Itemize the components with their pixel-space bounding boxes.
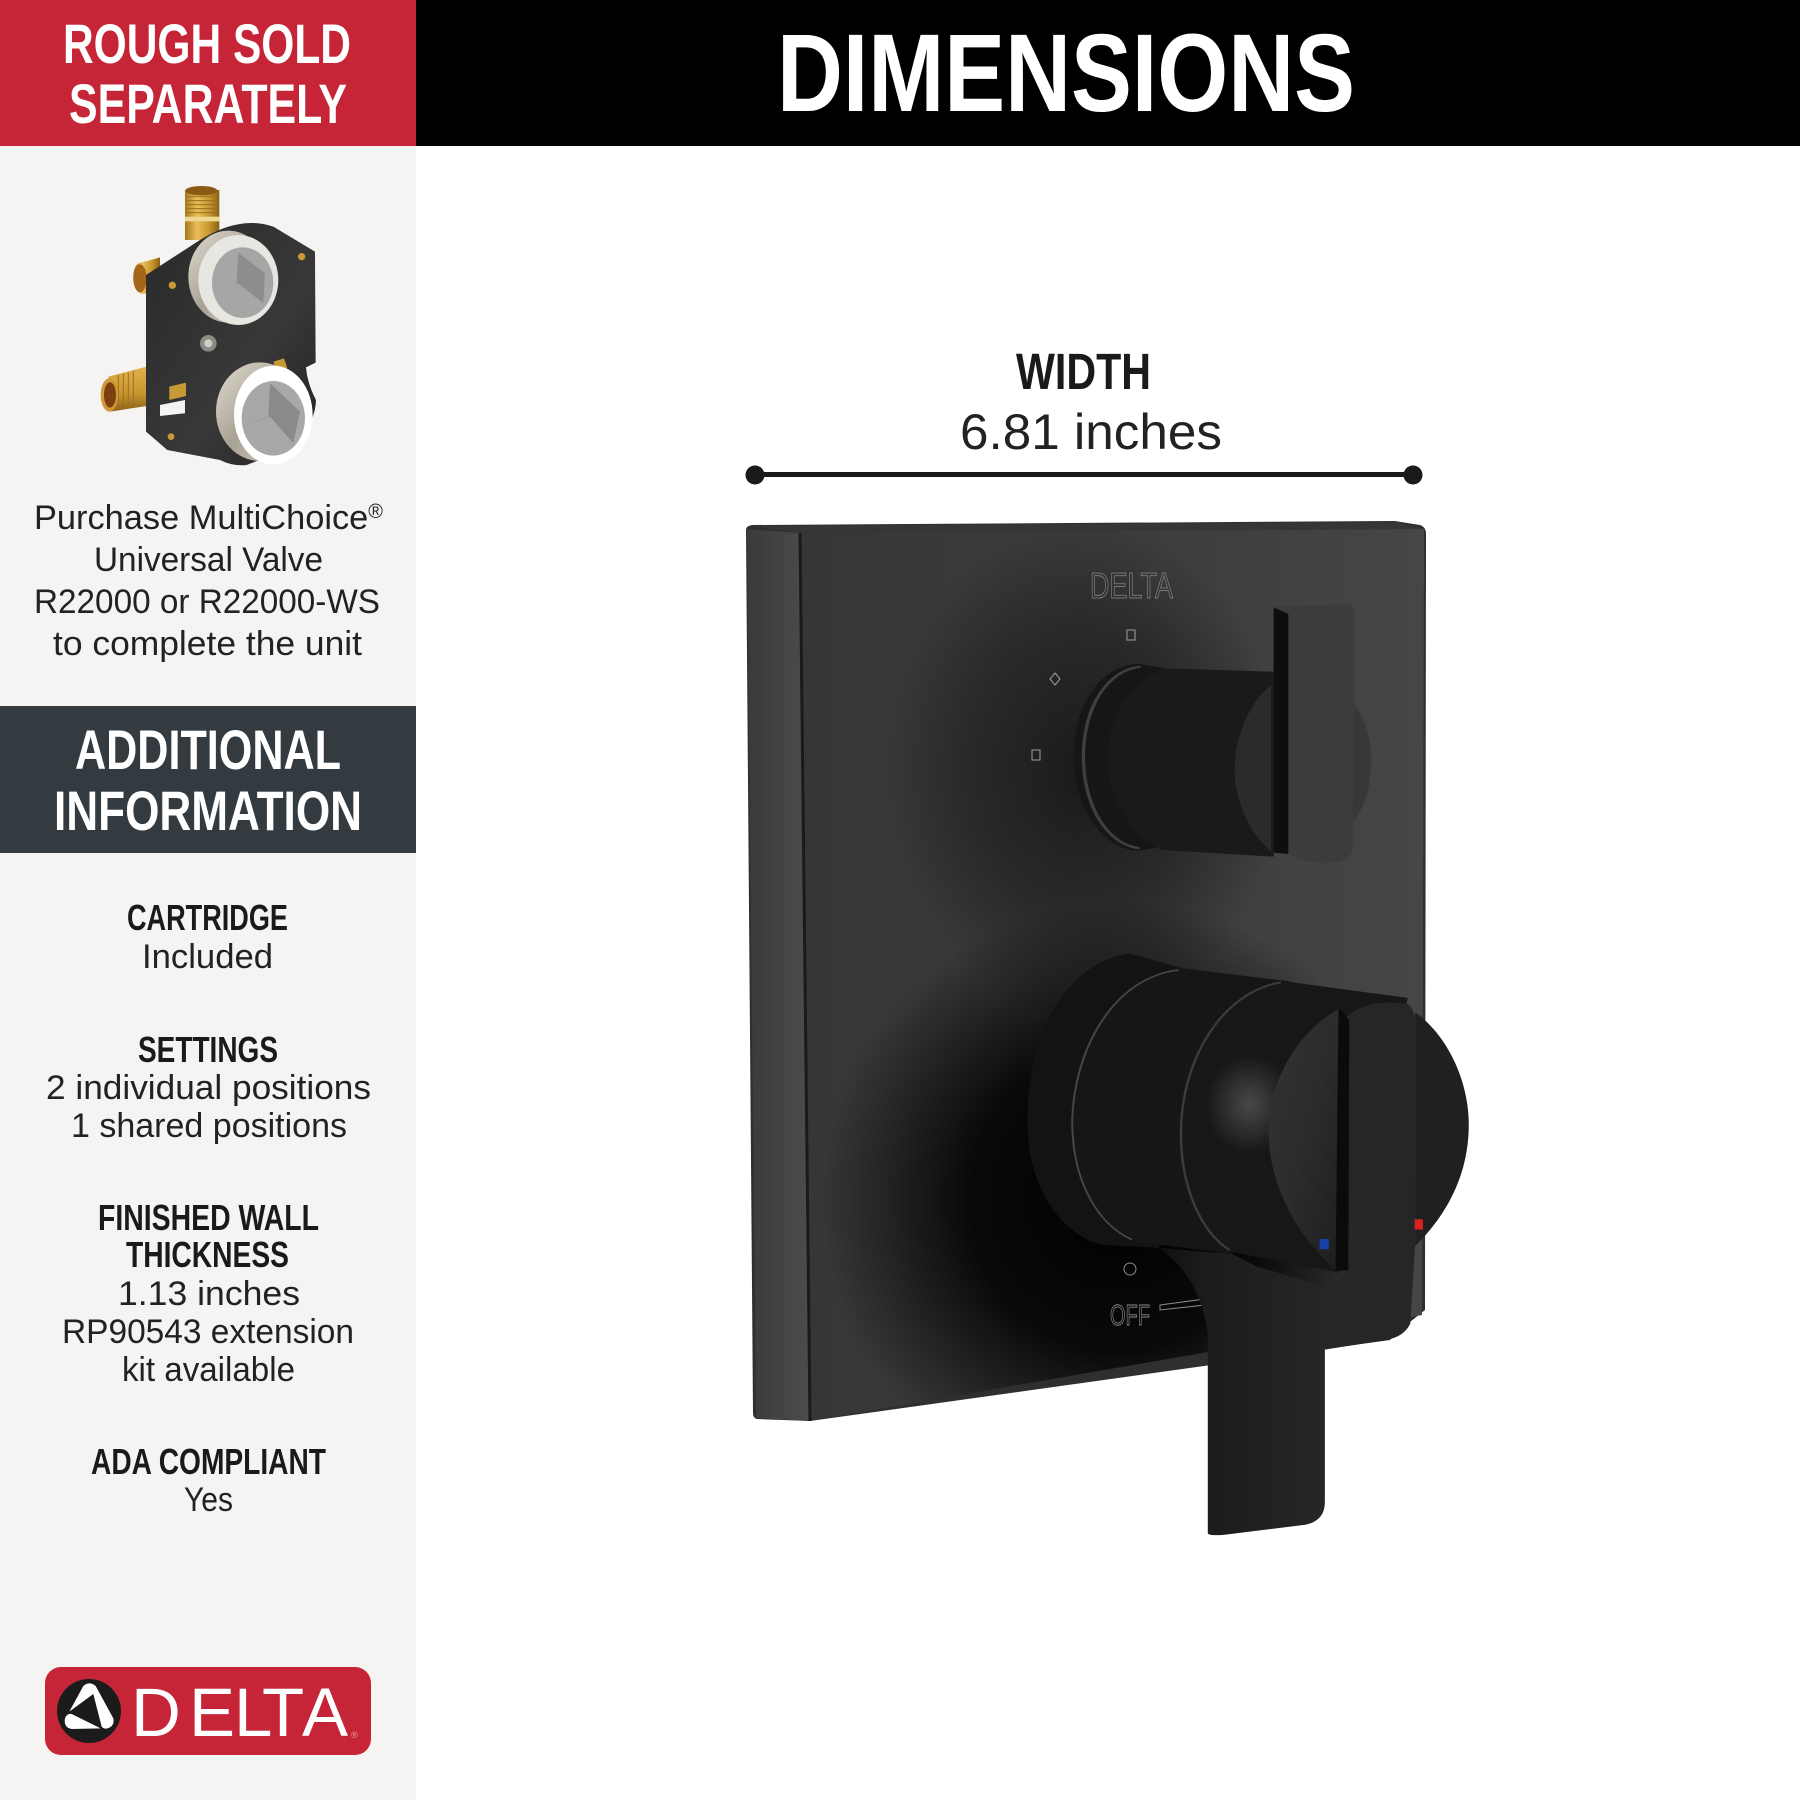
lever handle	[1159, 1248, 1325, 1535]
title banner: dimensions: DIMENSIONS	[777, 12, 1355, 135]
spec: settings	[46, 1029, 371, 1145]
wall plate	[746, 520, 1426, 1500]
plate markings	[1032, 565, 1173, 760]
sidebar background	[0, 146, 416, 1800]
red banner: rough sold separately	[0, 0, 416, 146]
text block: purchase note: to complete the unit	[53, 625, 362, 663]
text block: purchase note: Purchase MultiChoice	[34, 499, 370, 537]
product image: shower trim	[746, 520, 1469, 1535]
heading: width dimension: 6.81 inches	[960, 404, 1222, 460]
spec: settings: SETTINGS	[138, 1029, 278, 1070]
product image: rough valve	[101, 186, 316, 465]
spec: finished wall thickness: RP90543 extension	[62, 1313, 354, 1351]
spec: finished wall thickness	[62, 1197, 354, 1389]
spec: cartridge	[127, 897, 288, 976]
spec: finished wall thickness: FINISHED WALL	[98, 1197, 319, 1238]
spec: settings: 2 individual positions	[46, 1069, 371, 1107]
text block: purchase note: ®	[368, 501, 383, 523]
logo: delta	[45, 1667, 371, 1755]
spec: cartridge: CARTRIDGE	[127, 897, 288, 938]
upper diverter knob	[1074, 604, 1371, 863]
spec: settings: 1 shared positions	[71, 1107, 347, 1145]
title banner: dimensions	[416, 0, 1800, 146]
lower handle assembly	[1027, 954, 1469, 1350]
logo: delta: ®	[351, 1730, 358, 1740]
off marking	[1110, 1263, 1205, 1332]
spec: ada compliant	[91, 1441, 326, 1519]
spec: ada compliant: ADA COMPLIANT	[91, 1441, 326, 1482]
text block: purchase note: Universal Valve	[94, 541, 323, 579]
heading: additional information: ADDITIONAL	[75, 718, 341, 781]
heading: width dimension: WIDTH	[1016, 343, 1151, 400]
heading: additional information	[0, 706, 416, 853]
red banner: rough sold separately: SEPARATELY	[69, 72, 347, 135]
plate markings: DELTA	[1090, 565, 1173, 606]
red banner: rough sold separately: ROUGH SOLD	[63, 12, 351, 75]
text block: purchase note	[34, 499, 383, 663]
heading: additional information: INFORMATION	[54, 779, 362, 842]
off marking: OFF	[1110, 1300, 1150, 1332]
spec: finished wall thickness: 1.13 inches	[118, 1275, 300, 1313]
arrow: width dimension line	[746, 466, 1422, 484]
text block: purchase note: R22000 or R22000-WS	[34, 583, 380, 621]
spec: cartridge: Included	[142, 938, 273, 976]
spec: finished wall thickness: THICKNESS	[126, 1234, 289, 1275]
logo: delta: DELTA	[131, 1674, 348, 1751]
spec: ada compliant: Yes	[184, 1481, 233, 1519]
heading: width dimension	[960, 343, 1222, 460]
spec: finished wall thickness: kit available	[122, 1351, 295, 1389]
